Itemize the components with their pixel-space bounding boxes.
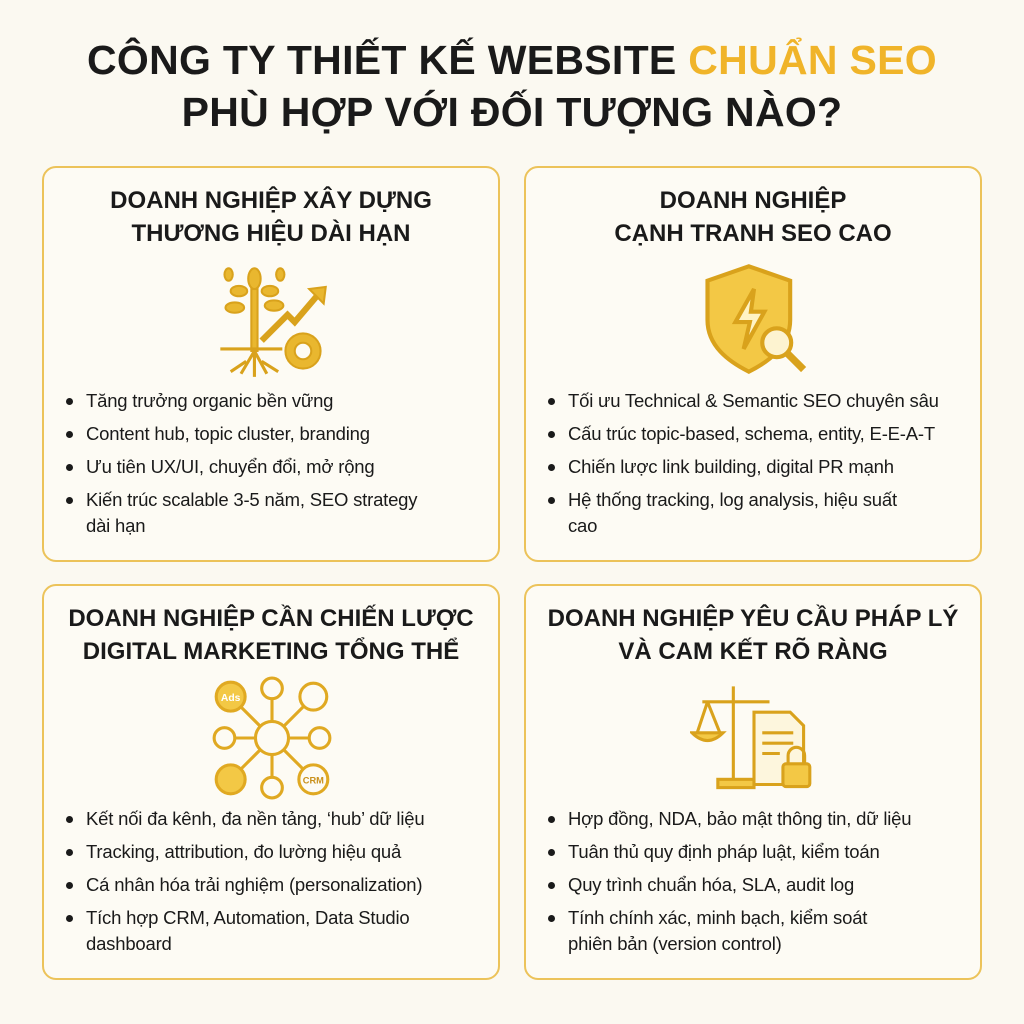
bullet list: Tuân thủ quy định pháp luật, kiểm toán [568,841,880,862]
bullet list: dài hạn [86,515,145,536]
bullet list: Ưu tiên UX/UI, chuyển đổi, mở rộng [86,456,374,477]
bullet list: cao [568,515,597,536]
heading [614,186,892,247]
bullet list: Tăng trưởng organic bền vững [86,390,333,411]
heading: DOANH NGHIỆP CẦN CHIẾN LƯỢC [68,605,474,632]
heading: DIGITAL MARKETING TỔNG THỂ [83,638,459,665]
icon: tree with arrow and gear [220,267,327,377]
bullet list [548,390,939,536]
heading [110,186,432,247]
heading: CẠNH TRANH SEO CAO [614,220,892,247]
heading: DOANH NGHIỆP [660,187,846,214]
panel: digital marketing [42,584,500,980]
bullet list: Tracking, attribution, đo lường hiệu quả [86,841,401,862]
heading: DOANH NGHIỆP XÂY DỰNG [110,187,432,214]
heading: THƯƠNG HIỆU DÀI HẠN [131,220,411,247]
icon: shield with magnifier [705,264,806,374]
panel: long-term brand [42,166,500,562]
bullet list: Tối ưu Technical & Semantic SEO chuyên sâu [568,390,939,411]
title: CÔNG TY THIẾT KẾ WEBSITE CHUẨN SEO [87,37,937,83]
bullet list: Kiến trúc scalable 3-5 năm, SEO strategy [86,489,417,510]
heading: VÀ CAM KẾT RÕ RÀNG [618,638,888,665]
icon: scales document lock [690,686,812,790]
title [87,37,937,135]
panel: legal [524,584,982,980]
bullet list: Tính chính xác, minh bạch, kiểm soát [568,907,867,928]
panel: SEO competition [524,166,982,562]
bullet list: Chiến lược link building, digital PR mạnh [568,456,894,477]
icon: marketing hub [212,676,332,800]
bullet list: Content hub, topic cluster, branding [86,423,370,444]
bullet list: Kết nối đa kênh, đa nền tảng, ‘hub’ dữ liệu [86,808,424,829]
heading: DOANH NGHIỆP YÊU CẦU PHÁP LÝ [548,605,958,632]
bullet list [66,390,418,536]
bullet list [66,808,424,954]
bullet list: Quy trình chuẩn hóa, SLA, audit log [568,874,854,895]
bullet list: phiên bản (version control) [568,933,782,954]
title: PHÙ HỢP VỚI ĐỐI TƯỢNG NÀO? [182,89,842,135]
bullet list: Hệ thống tracking, log analysis, hiệu suất [568,489,897,510]
bullet list: Cấu trúc topic-based, schema, entity, E-E-A-T [568,423,935,444]
heading [548,604,958,665]
bullet list: Tích hợp CRM, Automation, Data Studio [86,907,410,928]
bullet list: Cá nhân hóa trải nghiệm (personalization) [86,874,422,895]
bullet list [548,808,911,954]
heading [68,604,474,665]
icon: marketing hub: CRM [303,775,324,785]
bullet list: Hợp đồng, NDA, bảo mật thông tin, dữ liệu [568,808,911,829]
bullet list: dashboard [86,933,172,954]
icon: marketing hub: Ads [221,693,241,704]
